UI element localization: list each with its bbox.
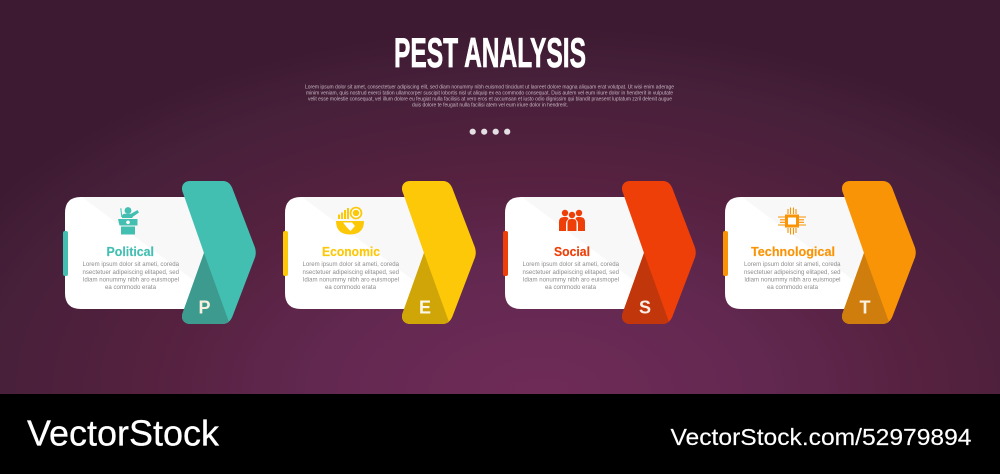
heading: Economic	[322, 244, 380, 259]
intro text block	[305, 84, 674, 109]
heading: Political	[106, 244, 154, 259]
icon: speaker at podium	[118, 207, 139, 234]
letter: E	[419, 298, 431, 318]
title: PEST ANALYSIS	[394, 29, 586, 76]
arrow shadow fold	[842, 253, 889, 324]
icon: group of people	[559, 210, 585, 231]
card shade	[82, 197, 204, 283]
description: nsectetuer adipeiscing elitaped, sed	[522, 269, 619, 276]
intro text block: minim veniam, quis nostrud exerci tation ullamcorper suscipit lobortis nisl ut aliquip ex ea commodo consequat. Duis autem vel eum iriure dolor in hendrerit in vulputate	[306, 90, 673, 96]
description: Lorem ipsum dolor sit ameti, coreda	[302, 261, 399, 268]
card shade	[302, 197, 424, 283]
pagination dots	[470, 129, 510, 135]
description: Lorem ipsum dolor sit ameti, coreda	[522, 261, 619, 268]
description: nsectetuer adipeiscing elitaped, sed	[744, 269, 841, 276]
side tab	[723, 231, 728, 276]
letter: T	[860, 298, 870, 318]
side tab	[63, 231, 68, 276]
arrow shadow fold	[622, 253, 669, 324]
arrow	[842, 181, 916, 324]
description: nsectetuer adipeiscing elitaped, sed	[82, 269, 179, 276]
panel: economic	[283, 181, 476, 324]
description	[302, 261, 399, 291]
intro text block: Lorem ipsum dolor sit amet, consectetuer adipiscing elit, sed diam nonummy nibh euismod tincidunt ut laoreet dolore magna aliquam erat volutpat. Ut wisi enim aderage	[305, 84, 674, 90]
arrow	[402, 181, 476, 324]
card shade	[742, 197, 864, 283]
footer logo text: VectorStock	[27, 413, 220, 454]
description: ldiam nonummy nibh aro euismopel	[523, 276, 619, 284]
arrow	[622, 181, 696, 324]
intro text block: velit esse molestie consequat, vel illum dolore eu feugiat nulla facilisis at vero eros et accumsan et iusto odio dignissim qui blandit praesent luptatum zzril delenit augue	[308, 97, 672, 103]
card shade	[522, 197, 644, 283]
side tab	[283, 231, 288, 276]
panel: technological	[723, 181, 916, 324]
icon: microchip	[778, 208, 806, 234]
letter: P	[198, 298, 211, 318]
arrow shadow fold	[402, 253, 449, 324]
description: ldiam nonummy nibh aro euismopel	[83, 276, 179, 284]
card: political	[65, 197, 204, 309]
intro text block: duis dolore te feugait nulla facilisi atem vel eum iriure dolor in hendrerit.	[412, 103, 568, 109]
description: ea commodo erata	[767, 284, 818, 291]
icon: globe bowl and coin	[336, 207, 364, 234]
description	[522, 261, 619, 291]
panel: social	[503, 181, 696, 324]
description	[744, 261, 841, 291]
card: social	[505, 197, 644, 309]
description: ldiam nonummy nibh aro euismopel	[303, 276, 399, 284]
letter: S	[639, 298, 651, 318]
description: ea commodo erata	[105, 284, 156, 291]
description	[82, 261, 179, 291]
heading: Technological	[751, 244, 835, 259]
arrow shadow fold	[182, 253, 229, 324]
panel: political	[63, 181, 256, 324]
card: technological	[725, 197, 864, 309]
footer bar	[0, 394, 1000, 474]
description: nsectetuer adipeiscing elitaped, sed	[302, 269, 399, 276]
description: Lorem ipsum dolor sit ameti, coreda	[744, 261, 841, 268]
arrow	[182, 181, 256, 324]
footer image id: VectorStock.com/52979894	[670, 424, 972, 450]
description: ea commodo erata	[545, 284, 596, 291]
description: ea commodo erata	[325, 284, 376, 291]
card: economic	[285, 197, 424, 309]
heading: Social	[554, 244, 590, 259]
description: ldiam nonummy nibh aro euismopel	[744, 276, 840, 284]
side tab	[503, 231, 508, 276]
description: Lorem ipsum dolor sit ameti, coreda	[82, 261, 179, 268]
